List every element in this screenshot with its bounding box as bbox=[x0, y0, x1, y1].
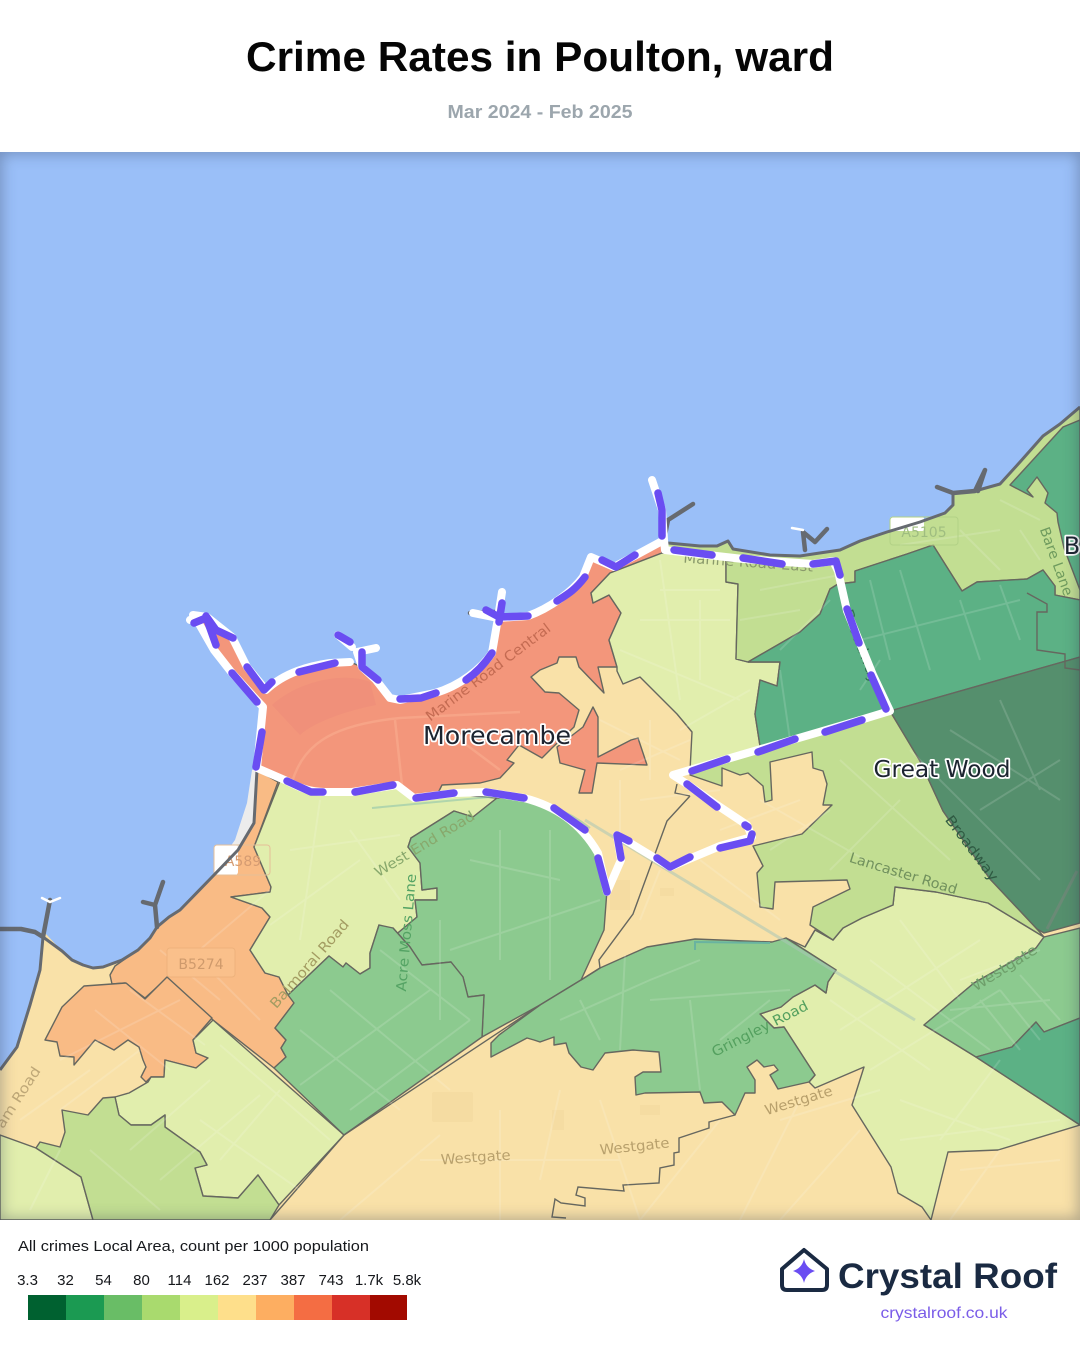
label: Lancaster Road: Lancaster Road bbox=[847, 850, 959, 898]
sea bbox=[0, 152, 1080, 1068]
pier tips white bbox=[42, 528, 803, 902]
place label: clipped B: B bbox=[1064, 532, 1080, 560]
beach strip bbox=[232, 770, 256, 848]
road shield: A5105 bbox=[890, 517, 958, 545]
road shield: A5105: A5105 bbox=[901, 525, 947, 541]
label: Broadway under road: Broadway bbox=[839, 607, 882, 686]
icon: house with star bbox=[782, 1250, 827, 1290]
lighter road on red zone bbox=[290, 712, 520, 790]
legend scale values: 162 bbox=[204, 1272, 230, 1289]
legend scale values: 32 bbox=[57, 1272, 74, 1289]
legend scale values: 1.7k bbox=[355, 1272, 384, 1289]
sand texture on red zone bbox=[272, 678, 376, 735]
legend colour ramp bbox=[28, 1295, 407, 1320]
legend scale values: 5.8k bbox=[393, 1272, 422, 1289]
legend scale values: 3.3 bbox=[17, 1272, 38, 1289]
place label: Great Wood: Great Wood bbox=[874, 755, 1010, 783]
legend scale values: 237 bbox=[242, 1272, 268, 1289]
legend title: All crimes Local Area, count per 1000 population bbox=[18, 1238, 369, 1255]
road shield: A589: A589 bbox=[225, 854, 261, 870]
railway line bbox=[585, 820, 915, 1020]
website url: crystalroof.co.uk bbox=[880, 1305, 1009, 1322]
subtitle: date range: Mar 2024 - Feb 2025 bbox=[448, 102, 632, 122]
coastline bbox=[0, 407, 1080, 1070]
label: Broadway: Broadway bbox=[941, 813, 1001, 885]
land base: tan crime band bbox=[0, 658, 1080, 1220]
Crystal Roof logo bbox=[782, 1250, 1057, 1322]
legend scale values bbox=[17, 1272, 422, 1289]
zone: darkest green Great Wood bbox=[890, 657, 1080, 933]
ward boundary: white base line bbox=[190, 480, 890, 892]
internal ward boundary lines bbox=[270, 593, 1080, 1220]
place label: Morecambe: Morecambe bbox=[423, 721, 571, 750]
label: Westgate south: Westgate bbox=[440, 1148, 511, 1168]
legend scale values: 387 bbox=[280, 1272, 306, 1289]
stone piers bbox=[0, 470, 985, 937]
label: Balmoral Road: Balmoral Road bbox=[267, 917, 353, 1012]
zone: high crime red-orange Morecambe centre bbox=[197, 541, 663, 798]
legend scale values: 743 bbox=[318, 1272, 344, 1289]
zone: pale yellow-green areas bbox=[0, 553, 1080, 1220]
label: Westgate south-east: Westgate bbox=[763, 1083, 835, 1119]
minor streets bbox=[20, 500, 1060, 1220]
reservoir outline bbox=[695, 942, 770, 950]
zone: mid green areas bbox=[274, 798, 1080, 1135]
zone: dark green areas bbox=[748, 420, 1080, 1125]
label: Marine Road East: Marine Road East bbox=[683, 550, 814, 576]
canal path bbox=[372, 796, 590, 828]
building patches bbox=[432, 880, 674, 1130]
legend scale values: 80 bbox=[133, 1272, 150, 1289]
label: Westgate east: Westgate bbox=[969, 942, 1040, 995]
road shield: B5274: B5274 bbox=[178, 957, 224, 973]
label: Bare Lane: Bare Lane bbox=[1036, 525, 1076, 598]
ward boundary: purple dashes bbox=[194, 493, 886, 892]
label: Gringley Road: Gringley Road bbox=[709, 998, 811, 1061]
label: Westgate centre: Westgate bbox=[599, 1135, 670, 1159]
grey road through Great Wood bbox=[1047, 871, 1077, 929]
label: West End Road: West End Road bbox=[372, 808, 478, 881]
label: Acre Moss Lane: Acre Moss Lane bbox=[394, 873, 420, 992]
title: Crime Rates in Poulton, ward bbox=[246, 33, 834, 80]
legend bbox=[17, 1238, 422, 1320]
choropleth map bbox=[0, 152, 1080, 1220]
zone: orange west end bbox=[45, 770, 294, 1082]
legend scale values: 114 bbox=[168, 1272, 191, 1289]
zone: light green areas bbox=[36, 407, 1080, 1220]
road shield: B5274 bbox=[167, 948, 235, 977]
road shield: A589 bbox=[214, 845, 270, 875]
wordmark: Crystal Roof bbox=[838, 1257, 1057, 1296]
legend scale values: 54 bbox=[95, 1272, 112, 1289]
road labels bbox=[0, 525, 1076, 1168]
label: Marine Road Central: Marine Road Central bbox=[423, 621, 554, 725]
